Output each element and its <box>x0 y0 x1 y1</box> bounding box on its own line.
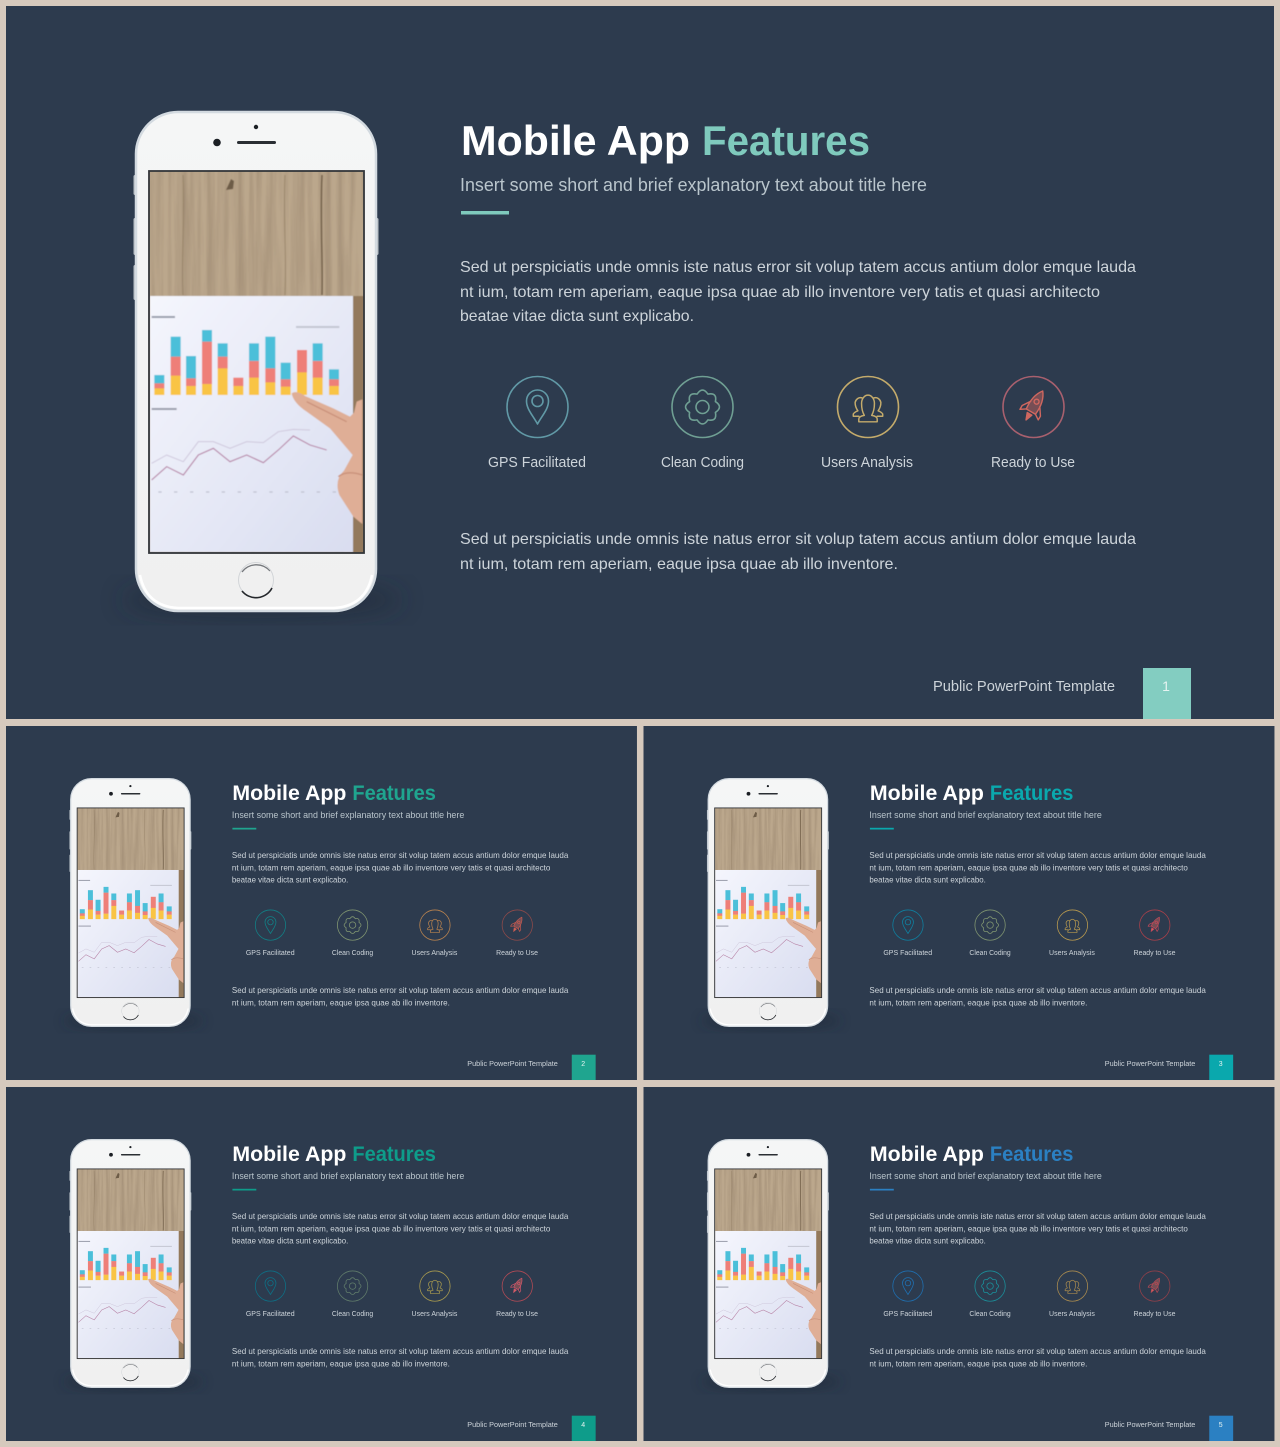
title: Features <box>990 782 1073 805</box>
paragraph bottom: nt ium, totam rem aperiam, eaque ipsa quae ab illo inventore. <box>232 999 450 1008</box>
panel: slide 4 <box>6 1087 637 1441</box>
icon: gear <box>337 910 368 940</box>
icon labels: GPS Facilitated <box>883 948 932 957</box>
paragraph bottom: Sed ut perspiciatis unde omnis iste natus error sit volup tatem accus antium dolor emque lauda <box>869 986 1206 995</box>
page number box <box>1209 1055 1233 1080</box>
icon labels: Ready to Use <box>1134 948 1175 957</box>
paragraph bottom: nt ium, totam rem aperiam, eaque ipsa quae ab illo inventore. <box>232 1360 450 1369</box>
icon labels: Users Analysis <box>412 1309 458 1318</box>
icon: users <box>420 1271 450 1301</box>
title: Mobile App <box>870 782 984 805</box>
paragraph top: nt ium, totam rem aperiam, eaque ipsa quae ab illo inventore very tatis et quasi architecto <box>232 1224 551 1233</box>
accent line <box>870 1189 894 1191</box>
paragraph top: nt ium, totam rem aperiam, eaque ipsa quae ab illo inventore very tatis et quasi architecto <box>869 863 1188 872</box>
paragraph bottom <box>869 986 1206 1008</box>
icon labels: Clean Coding <box>332 1309 373 1318</box>
paragraph bottom: Sed ut perspiciatis unde omnis iste natus error sit volup tatem accus antium dolor emque lauda <box>232 986 569 995</box>
icon labels: GPS Facilitated <box>246 948 295 957</box>
page number box: 2 <box>581 1061 585 1068</box>
icon labels: Users Analysis <box>821 454 913 471</box>
page number box: 4 <box>581 1422 585 1429</box>
paragraph bottom: nt ium, totam rem aperiam, eaque ipsa quae ab illo inventore. <box>869 1360 1087 1369</box>
icon labels: Users Analysis <box>412 948 458 957</box>
subtitle: Insert some short and brief explanatory text about title here <box>232 810 464 820</box>
subtitle: Insert some short and brief explanatory text about title here <box>869 1171 1102 1181</box>
page number box <box>1143 668 1191 719</box>
icon labels: Ready to Use <box>1134 1309 1175 1318</box>
icon: rocket <box>1003 376 1064 438</box>
phone mockup <box>701 1140 841 1391</box>
paragraph top: beatae vitae dicta sunt explicabo. <box>869 1236 986 1245</box>
page number box: 5 <box>1219 1422 1223 1429</box>
icon labels: Clean Coding <box>969 1309 1011 1318</box>
title: Mobile App <box>461 117 690 164</box>
icon: GPS pin <box>893 1271 923 1301</box>
icon: gear <box>672 376 733 438</box>
phone mockup <box>64 779 203 1030</box>
title <box>232 782 436 805</box>
paragraph top: Sed ut perspiciatis unde omnis iste natus error sit volup tatem accus antium dolor emque lauda <box>869 1212 1206 1221</box>
paragraph top <box>869 851 1206 884</box>
paragraph bottom: nt ium, totam rem aperiam, eaque ipsa quae ab illo inventore. <box>869 999 1087 1008</box>
icon labels <box>246 1309 538 1318</box>
icon: GPS pin <box>255 1271 286 1301</box>
icon: gear <box>975 910 1005 940</box>
icon labels <box>883 948 1175 957</box>
subtitle: Insert some short and brief explanatory text about title here <box>869 810 1102 820</box>
paragraph top: beatae vitae dicta sunt explicabo. <box>869 875 986 884</box>
title: Features <box>352 1143 436 1166</box>
paragraph bottom <box>869 1347 1206 1369</box>
footer label: Public PowerPoint Template <box>1105 1420 1195 1429</box>
page number box: 1 <box>1162 678 1170 694</box>
icon labels: GPS Facilitated <box>246 1309 295 1318</box>
accent line <box>870 828 894 830</box>
paragraph top: beatae vitae dicta sunt explicabo. <box>232 875 348 884</box>
icon: gear <box>975 1271 1005 1301</box>
paragraph bottom: Sed ut perspiciatis unde omnis iste natus error sit volup tatem accus antium dolor emque lauda <box>869 1347 1206 1356</box>
paragraph bottom: Sed ut perspiciatis unde omnis iste natus error sit volup tatem accus antium dolor emque lauda <box>232 1347 569 1356</box>
icon: gear <box>337 1271 368 1301</box>
title: Features <box>702 117 870 164</box>
icon labels: Clean Coding <box>332 948 373 957</box>
paragraph top: nt ium, totam rem aperiam, eaque ipsa quae ab illo inventore very tatis et quasi architecto <box>460 284 1100 301</box>
paragraph top <box>232 851 569 884</box>
icon: users <box>420 910 450 940</box>
icon labels: Clean Coding <box>969 948 1011 957</box>
icon: rocket <box>1140 910 1170 940</box>
title: Features <box>990 1143 1073 1166</box>
icon: GPS pin <box>893 910 923 940</box>
accent line <box>232 1189 256 1191</box>
paragraph top: Sed ut perspiciatis unde omnis iste natus error sit volup tatem accus antium dolor emque lauda <box>869 851 1206 860</box>
icon labels: Users Analysis <box>1049 948 1095 957</box>
panel: slide 2 <box>6 726 637 1080</box>
paragraph bottom <box>460 531 1136 573</box>
paragraph top: beatae vitae dicta sunt explicabo. <box>460 308 694 325</box>
panel: slide 5 <box>644 1087 1274 1441</box>
subtitle: Insert some short and brief explanatory text about title here <box>232 1171 464 1181</box>
icon labels: Ready to Use <box>496 1309 538 1318</box>
icon: users <box>838 376 898 438</box>
icon labels <box>246 948 538 957</box>
page number box <box>572 1055 596 1080</box>
paragraph top: beatae vitae dicta sunt explicabo. <box>232 1236 348 1245</box>
title: Mobile App <box>232 782 346 805</box>
paragraph bottom <box>232 1347 569 1369</box>
accent line <box>232 828 256 830</box>
title: Features <box>352 782 436 805</box>
paragraph top <box>460 259 1136 325</box>
accent line <box>461 211 509 214</box>
icon labels <box>488 454 1075 471</box>
icon labels: Clean Coding <box>661 454 744 471</box>
paragraph top <box>869 1212 1206 1245</box>
icon labels <box>883 1309 1175 1318</box>
footer label: Public PowerPoint Template <box>1105 1059 1195 1068</box>
paragraph top: nt ium, totam rem aperiam, eaque ipsa quae ab illo inventore very tatis et quasi architecto <box>869 1224 1188 1233</box>
icon labels: GPS Facilitated <box>883 1309 932 1318</box>
paragraph top <box>232 1212 569 1245</box>
icon: users <box>1057 910 1088 940</box>
paragraph top: Sed ut perspiciatis unde omnis iste natus error sit volup tatem accus antium dolor emque lauda <box>460 259 1136 276</box>
page number box <box>572 1416 596 1441</box>
footer label: Public PowerPoint Template <box>467 1420 558 1429</box>
icon: rocket <box>1140 1271 1170 1301</box>
icon: rocket <box>502 910 532 940</box>
paragraph bottom: Sed ut perspiciatis unde omnis iste natus error sit volup tatem accus antium dolor emque lauda <box>460 531 1136 548</box>
phone mockup <box>701 779 841 1030</box>
phone mockup <box>122 112 402 618</box>
page number box: 3 <box>1219 1061 1223 1068</box>
paragraph top: Sed ut perspiciatis unde omnis iste natus error sit volup tatem accus antium dolor emque lauda <box>232 1212 569 1221</box>
panel: slide 3 <box>644 726 1274 1080</box>
icon labels: GPS Facilitated <box>488 454 586 471</box>
footer label: Public PowerPoint Template <box>933 678 1115 695</box>
paragraph bottom <box>232 986 569 1008</box>
icon labels: Ready to Use <box>991 454 1075 471</box>
title <box>870 1143 1073 1166</box>
footer label: Public PowerPoint Template <box>467 1059 558 1068</box>
panel: main slide 1 <box>6 6 1274 719</box>
icon: users <box>1057 1271 1088 1301</box>
icon labels: Ready to Use <box>496 948 538 957</box>
icon labels: Users Analysis <box>1049 1309 1095 1318</box>
subtitle: Insert some short and brief explanatory text about title here <box>460 174 927 195</box>
paragraph top: nt ium, totam rem aperiam, eaque ipsa quae ab illo inventore very tatis et quasi architecto <box>232 863 551 872</box>
phone mockup <box>64 1140 203 1391</box>
title: Mobile App <box>232 1143 346 1166</box>
page number box <box>1209 1416 1233 1441</box>
paragraph top: Sed ut perspiciatis unde omnis iste natus error sit volup tatem accus antium dolor emque lauda <box>232 851 569 860</box>
title <box>461 117 870 164</box>
icon: GPS pin <box>255 910 286 940</box>
title <box>232 1143 436 1166</box>
icon: rocket <box>502 1271 532 1301</box>
paragraph bottom: nt ium, totam rem aperiam, eaque ipsa quae ab illo inventore. <box>460 556 898 573</box>
title: Mobile App <box>870 1143 984 1166</box>
title <box>870 782 1073 805</box>
icon: GPS pin <box>507 376 568 438</box>
